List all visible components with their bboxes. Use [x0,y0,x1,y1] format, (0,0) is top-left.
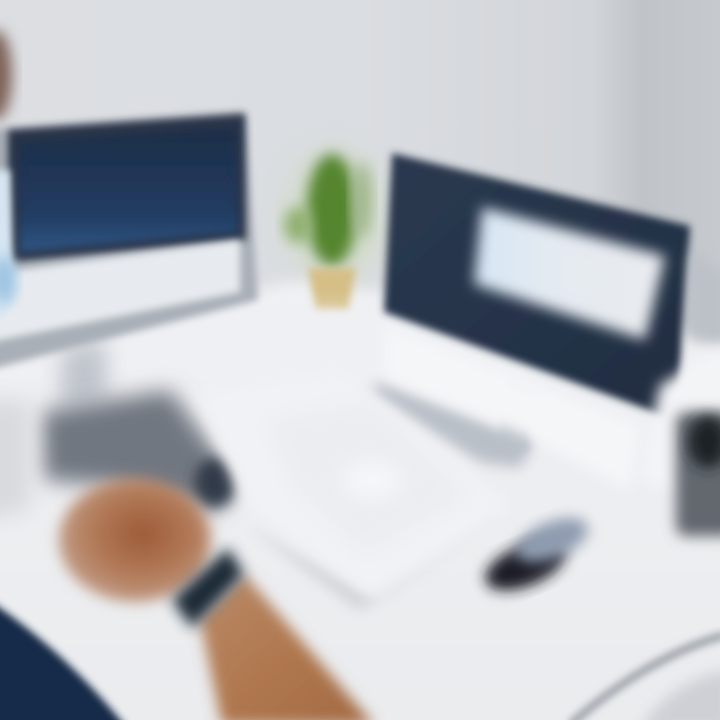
monitor body [384,153,690,420]
keyboard shadow [245,510,510,610]
white lower screen area [0,240,240,344]
object body [676,412,720,536]
monitor base [368,382,535,468]
right wall shadow and desk edge [688,250,720,345]
dark blue screen [18,128,238,252]
device dark edge [195,458,235,506]
potted plant [284,153,383,362]
keyboard body [195,370,512,596]
hand [59,478,211,602]
white window on screen [474,207,665,340]
monitor bezel [8,114,246,262]
chair dark rim [570,635,720,720]
light blue screen glow [0,170,14,330]
device light shelf [0,400,30,520]
device body [42,390,240,512]
left monitor [0,112,258,410]
chair arc at bottom right [570,635,720,720]
white under-monitor highlight [385,325,640,490]
person at the left edge [0,30,12,120]
dark blue sleeve [0,595,128,720]
object top [688,416,720,468]
monitor frame [0,112,258,372]
desk surface [0,280,720,720]
keyboard key area [265,400,470,555]
white keyboard [195,370,512,610]
hand, watch and arm [59,478,374,720]
dark object at right edge [676,412,720,536]
pot stand [302,312,358,362]
computer mouse [479,509,594,600]
wristwatch [172,548,244,628]
gray device on desk [0,390,240,520]
arm [200,575,374,720]
chair inner shade [640,670,720,720]
plant pot [308,268,356,310]
right monitor [368,153,690,490]
mouse shadow [479,532,571,600]
wall background [0,0,720,400]
plant glow [287,153,383,277]
mouse body [510,509,594,571]
monitor stand [60,340,108,410]
monitor stand [498,385,535,450]
plant leaves [307,154,357,266]
